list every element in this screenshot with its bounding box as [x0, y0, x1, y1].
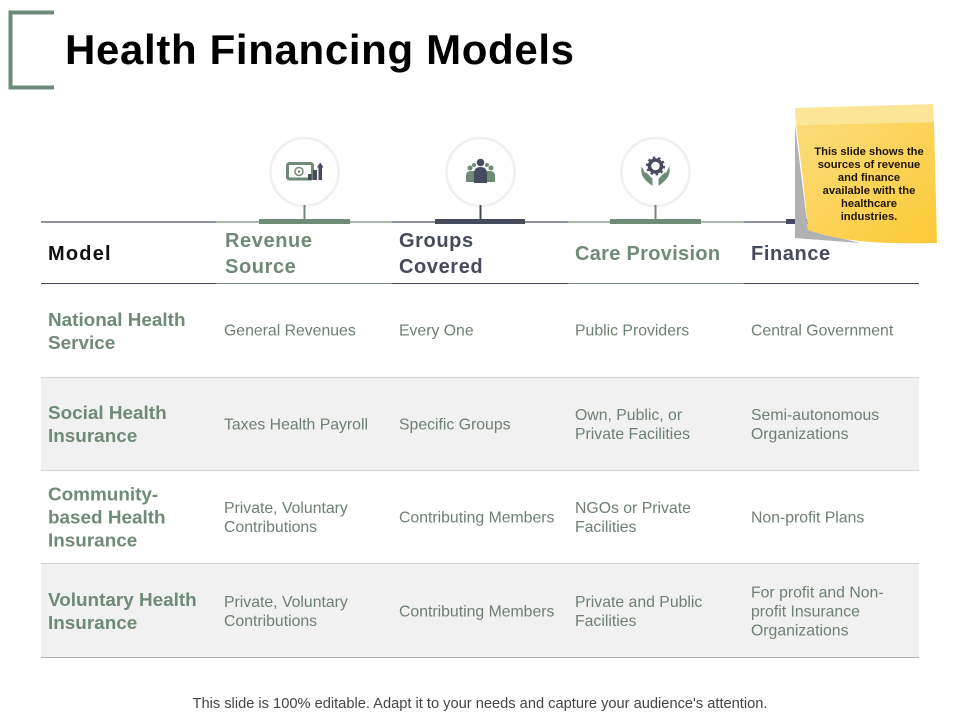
row: national health service: [48, 310, 894, 354]
icon: group of people: [466, 159, 495, 183]
sticky note text: This slide shows the: [814, 146, 924, 158]
sticky note text: sources of revenue: [818, 159, 920, 171]
row: national health service: Central Government: [751, 322, 893, 340]
row: voluntary health insurance: profit Insurance: [751, 604, 860, 620]
sticky note text: healthcare: [841, 198, 897, 210]
row: social health insurance: Insurance: [48, 426, 137, 447]
row: social health insurance: Taxes Health Payroll: [224, 416, 368, 434]
row: community-based health insurance: Private, Voluntary: [224, 500, 348, 517]
row: national health service: General Revenues: [224, 322, 356, 340]
row: national health service: Service: [48, 333, 115, 354]
row: voluntary health insurance: Contributions: [224, 613, 317, 630]
row: community-based health insurance: [48, 484, 864, 552]
column headers: Groups: [399, 230, 474, 252]
sticky note text: available with the: [823, 185, 915, 197]
row: voluntary health insurance: [48, 584, 884, 640]
row: social health insurance: Own, Public, or: [575, 407, 682, 424]
sticky note text: and finance: [838, 172, 900, 184]
row: voluntary health insurance: Voluntary Health: [48, 590, 197, 611]
column headers: Finance: [751, 243, 831, 265]
row: national health service: National Health: [48, 310, 186, 331]
icon column: revenue source: [259, 137, 350, 224]
column headers: Care Provision: [575, 243, 720, 265]
header rules: [41, 221, 919, 284]
row: community-based health insurance: Facilities: [575, 519, 636, 536]
column headers: Revenue: [225, 230, 313, 252]
column headers: Source: [225, 256, 296, 278]
row: social health insurance: Semi-autonomous: [751, 407, 879, 424]
icon: hands with gear: [642, 158, 669, 185]
row: social health insurance: Organizations: [751, 426, 848, 443]
row: community-based health insurance: Contributing Members: [399, 510, 554, 526]
row: social health insurance: Social Health: [48, 403, 167, 424]
bracket decoration: [8, 10, 54, 90]
row: voluntary health insurance: For profit and Non-: [751, 584, 884, 602]
title: Health Financing Models: [65, 26, 575, 73]
row: voluntary health insurance: Private and Public: [575, 594, 702, 611]
row: community-based health insurance: Community-: [48, 484, 158, 506]
row: voluntary health insurance: Facilities: [575, 613, 636, 630]
row: voluntary health insurance: Contributing Members: [399, 604, 554, 620]
row: community-based health insurance: Non-profit Plans: [751, 510, 864, 526]
row: national health service: Public Providers: [575, 322, 689, 340]
row: community-based health insurance: Insurance: [48, 530, 137, 552]
row: community-based health insurance: based Health: [48, 508, 166, 528]
row: community-based health insurance: NGOs or Private: [575, 500, 691, 517]
row: community-based health insurance: Contributions: [224, 519, 317, 536]
row: voluntary health insurance: Private, Voluntary: [224, 594, 348, 611]
row: social health insurance: Private Facilities: [575, 426, 690, 443]
column headers: Model: [48, 243, 112, 265]
sticky note text: [814, 146, 924, 223]
sticky note: [795, 104, 937, 244]
row: voluntary health insurance: Organizations: [751, 622, 848, 640]
row: social health insurance: [48, 403, 879, 447]
column headers: Covered: [399, 256, 483, 278]
sticky note text: industries.: [841, 211, 897, 223]
table stripes: [41, 377, 919, 658]
icon: money and growth: [288, 162, 324, 180]
row: national health service: Every One: [399, 322, 474, 340]
finance marker: [786, 219, 816, 224]
column headers: [48, 230, 831, 278]
row: voluntary health insurance: Insurance: [48, 613, 137, 634]
footer note: This slide is 100% editable. Adapt it to your needs and capture your audience's attention.: [193, 696, 767, 712]
row: social health insurance: Specific Groups: [399, 416, 511, 434]
